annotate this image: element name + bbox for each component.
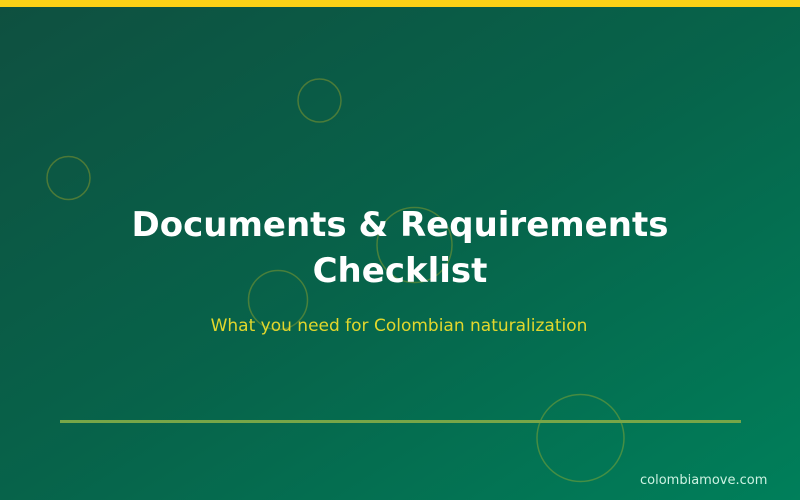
title: Documents & Requirements [132, 205, 668, 245]
title [132, 205, 668, 291]
title: Checklist [313, 251, 487, 291]
top accent bar [0, 0, 800, 7]
divider line [60, 420, 741, 423]
subtitle: What you need for Colombian naturalization [211, 316, 587, 336]
website credit: colombiamove.com [640, 473, 767, 488]
